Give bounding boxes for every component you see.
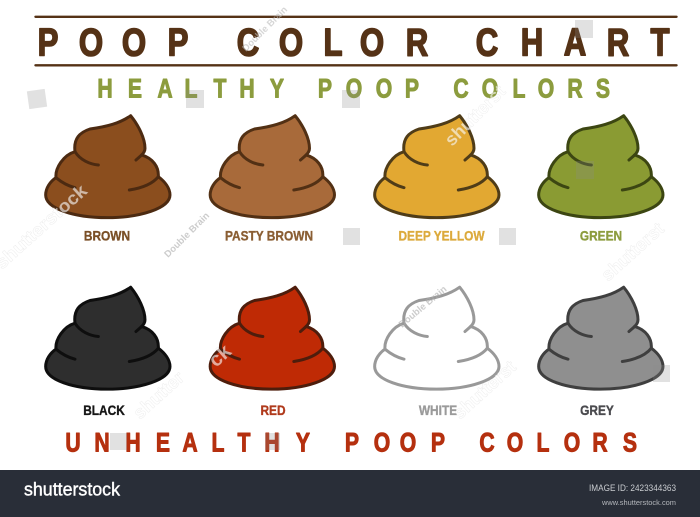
icon: brown poop bbox=[46, 116, 170, 218]
watermark overlay: Double Brain bbox=[240, 4, 290, 54]
label: white: WHITE bbox=[419, 402, 457, 418]
footer logo: shutterstock bbox=[24, 480, 121, 500]
watermark overlay: ck bbox=[205, 340, 237, 372]
label: green: GREEN bbox=[580, 228, 622, 244]
icon: pasty brown poop bbox=[210, 116, 334, 218]
image id bbox=[589, 483, 676, 507]
watermark overlay: shutter bbox=[129, 367, 188, 423]
label: red: RED bbox=[260, 402, 286, 418]
watermark overlay bbox=[0, 4, 668, 423]
icon: white poop bbox=[375, 287, 499, 389]
watermark overlay: Double Brain bbox=[162, 210, 212, 260]
watermark overlay: shutterst bbox=[597, 219, 668, 285]
label: black: BLACK bbox=[83, 402, 125, 418]
label: deep yellow: DEEP YELLOW bbox=[398, 228, 485, 244]
label: grey: GREY bbox=[580, 402, 614, 418]
icon: green poop bbox=[539, 116, 663, 218]
image id: IMAGE ID: 2423344363 bbox=[589, 483, 676, 493]
icon: black poop bbox=[46, 287, 170, 389]
watermark squares bbox=[27, 20, 670, 450]
icon: grey poop bbox=[539, 287, 663, 389]
heading: unhealthy poop colors: UNHEALTHY POOP COLORS bbox=[65, 428, 637, 458]
heading: healthy poop colors: HEALTHY POOP COLORS bbox=[97, 74, 610, 104]
label: brown: BROWN bbox=[84, 228, 130, 244]
image id: www.shutterstock.com bbox=[601, 498, 676, 507]
title: POOP COLOR CHART bbox=[38, 21, 670, 64]
label: pasty brown: PASTY BROWN bbox=[225, 228, 313, 244]
watermark overlay: Double Brain bbox=[397, 284, 449, 330]
watermark overlay: shutterst bbox=[449, 357, 520, 423]
footer bar bbox=[0, 470, 700, 517]
icon: deep yellow poop bbox=[375, 116, 499, 218]
icon: red poop bbox=[210, 287, 334, 389]
watermark overlay: shutterst bbox=[441, 81, 509, 150]
